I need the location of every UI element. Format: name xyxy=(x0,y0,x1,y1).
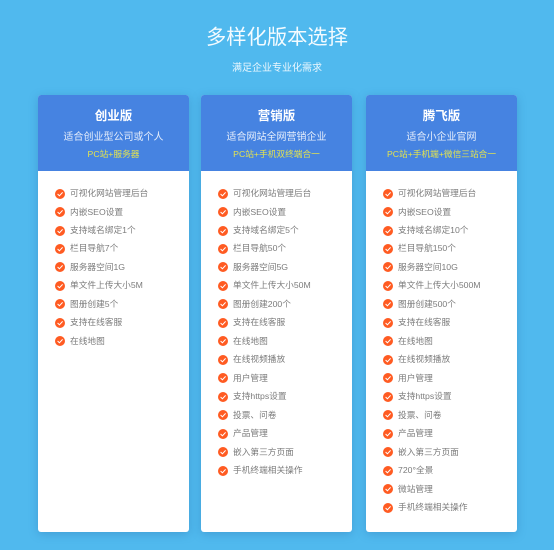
header: 腾飞版 xyxy=(366,95,517,171)
feature list: 腾飞版: 内嵌SEO设置 xyxy=(398,206,451,216)
header: 创业版 xyxy=(38,95,189,171)
feature list: 营销版: 支持https设置 xyxy=(233,391,287,401)
feature list: 腾飞版: 手机终端相关操作 xyxy=(398,502,468,512)
feature list: 创业版: 栏目导航7个 xyxy=(70,243,118,253)
header: 营销版: PC站+手机双终端合一 xyxy=(233,149,320,159)
feature list: 营销版: 用户管理 xyxy=(233,373,268,383)
header: 腾飞版: 适合小企业官网 xyxy=(406,132,476,142)
header: 创业版: PC站+服务器 xyxy=(88,149,139,159)
feature list: 腾飞版: 单文件上传大小500M xyxy=(398,280,481,290)
feature list: 创业版: 服务器空间1G xyxy=(70,262,125,272)
feature list: 创业版: 支持在线客服 xyxy=(70,317,122,327)
feature list: 营销版: 手机终端相关操作 xyxy=(233,465,302,475)
feature list: 腾飞版: 产品管理 xyxy=(398,428,433,438)
feature list: 腾飞版: 支持https设置 xyxy=(398,391,452,401)
feature list: 营销版: 单文件上传大小50M xyxy=(233,280,311,290)
feature list: 腾飞版: 可视化网站管理后台 xyxy=(398,188,476,198)
header: 创业版: 创业版 xyxy=(95,109,132,123)
header: 营销版 xyxy=(201,95,352,171)
feature list: 腾飞版: 在线视频播放 xyxy=(398,354,450,364)
feature list: 腾飞版 xyxy=(383,188,481,513)
feature list: 腾飞版: 服务器空间10G xyxy=(398,262,458,272)
feature list: 营销版: 内嵌SEO设置 xyxy=(233,206,286,216)
feature list: 腾飞版: 支持在线客服 xyxy=(398,317,450,327)
header: 营销版: 适合网站全网营销企业 xyxy=(226,132,326,142)
panel: 腾飞版 xyxy=(366,95,517,532)
subtitle: 满足企业专业化需求 xyxy=(232,62,322,74)
feature list: 创业版: 单文件上传大小5M xyxy=(70,280,143,290)
feature list: 腾飞版: 图册创建500个 xyxy=(398,299,456,309)
feature list: 腾飞版: 微站管理 xyxy=(398,484,433,494)
feature list: 营销版: 在线视频播放 xyxy=(233,354,285,364)
panel: 营销版 xyxy=(201,95,352,532)
feature list: 创业版: 图册创建5个 xyxy=(70,299,118,309)
panel: 创业版 xyxy=(38,95,189,532)
header: 腾飞版: 腾飞版 xyxy=(423,109,460,123)
feature list: 营销版: 服务器空间5G xyxy=(233,262,288,272)
feature list: 创业版: 内嵌SEO设置 xyxy=(70,206,123,216)
feature list: 营销版 xyxy=(218,188,311,476)
feature list: 创业版: 支持域名绑定1个 xyxy=(70,225,136,235)
feature list: 营销版: 栏目导航50个 xyxy=(233,243,286,253)
header: 创业版: 适合创业型公司或个人 xyxy=(64,132,164,142)
feature list: 营销版: 产品管理 xyxy=(233,428,268,438)
feature list: 营销版: 可视化网站管理后台 xyxy=(233,188,311,198)
feature list: 腾飞版: 嵌入第三方页面 xyxy=(398,447,459,457)
feature list: 腾飞版: 栏目导航150个 xyxy=(398,243,456,253)
feature list: 腾飞版: 720°全景 xyxy=(398,465,433,475)
feature list: 腾飞版: 用户管理 xyxy=(398,373,433,383)
title: 多样化版本选择 xyxy=(206,27,348,49)
feature list: 营销版: 投票、问卷 xyxy=(233,410,276,420)
feature list: 营销版: 支持在线客服 xyxy=(233,317,285,327)
feature list: 营销版: 图册创建200个 xyxy=(233,299,291,309)
feature list: 腾飞版: 在线地图 xyxy=(398,336,433,346)
feature list: 创业版: 可视化网站管理后台 xyxy=(70,188,148,198)
header: 腾飞版: PC站+手机端+微信三站合一 xyxy=(387,149,496,159)
feature list: 营销版: 嵌入第三方页面 xyxy=(233,447,294,457)
feature list: 腾飞版: 投票、问卷 xyxy=(398,410,441,420)
feature list: 创业版: 在线地图 xyxy=(70,336,105,346)
feature list: 营销版: 在线地图 xyxy=(233,336,268,346)
header: 营销版: 营销版 xyxy=(258,109,295,123)
feature list: 腾飞版: 支持域名绑定10个 xyxy=(398,225,468,235)
feature list: 营销版: 支持域名绑定5个 xyxy=(233,225,299,235)
feature list: 创业版 xyxy=(55,188,148,346)
